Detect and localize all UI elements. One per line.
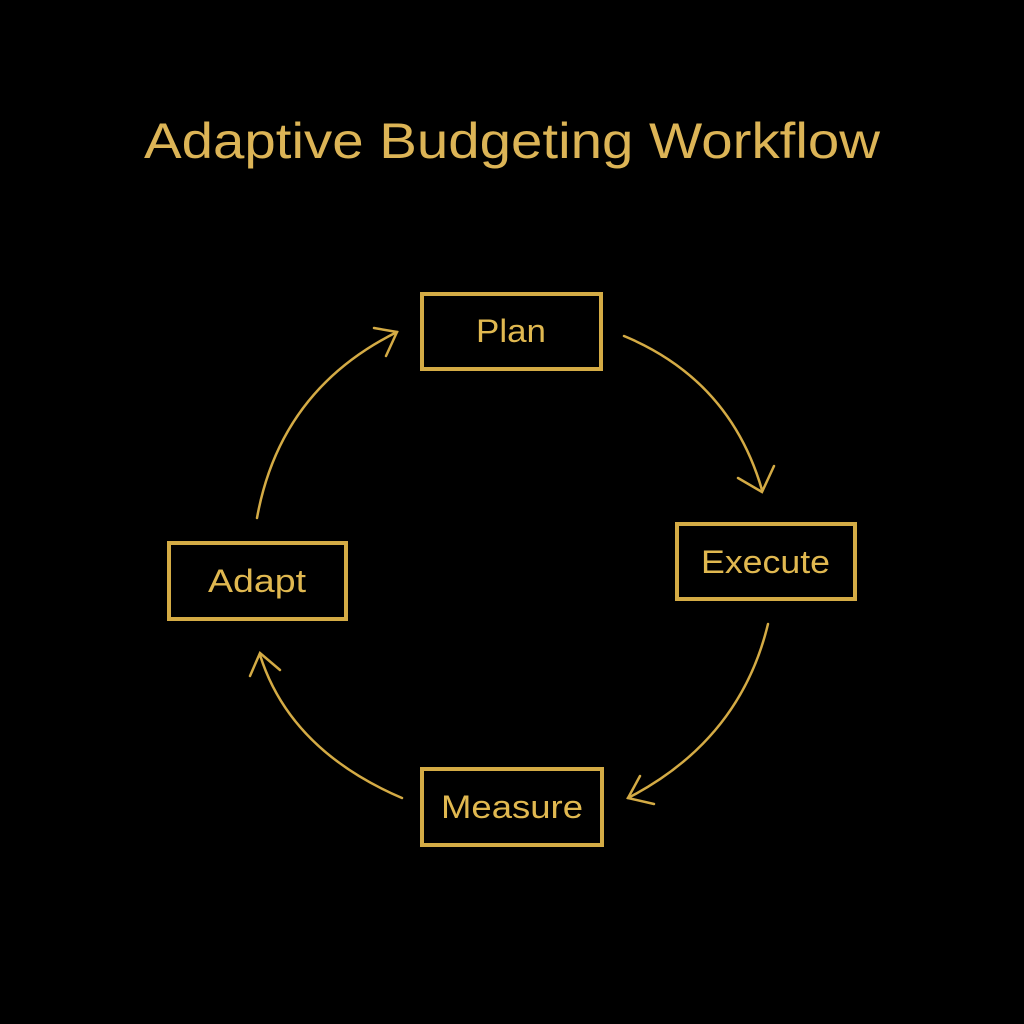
box: Adapt — [169, 543, 346, 619]
arrow: Execute to Measure — [628, 624, 768, 804]
box: Plan: Plan — [476, 313, 546, 349]
box: Adapt: Adapt — [208, 563, 306, 599]
box: Measure: Measure — [441, 789, 583, 825]
arrow: Measure to Adapt — [250, 653, 402, 798]
box: Plan — [422, 294, 601, 369]
arrow: Adapt to Plan — [257, 328, 397, 518]
arrow: Plan to Execute — [624, 336, 774, 492]
title: Adaptive Budgeting Workflow — [144, 113, 881, 169]
box: Execute: Execute — [701, 544, 830, 580]
box: Execute — [677, 524, 855, 599]
box: Measure — [422, 769, 602, 845]
